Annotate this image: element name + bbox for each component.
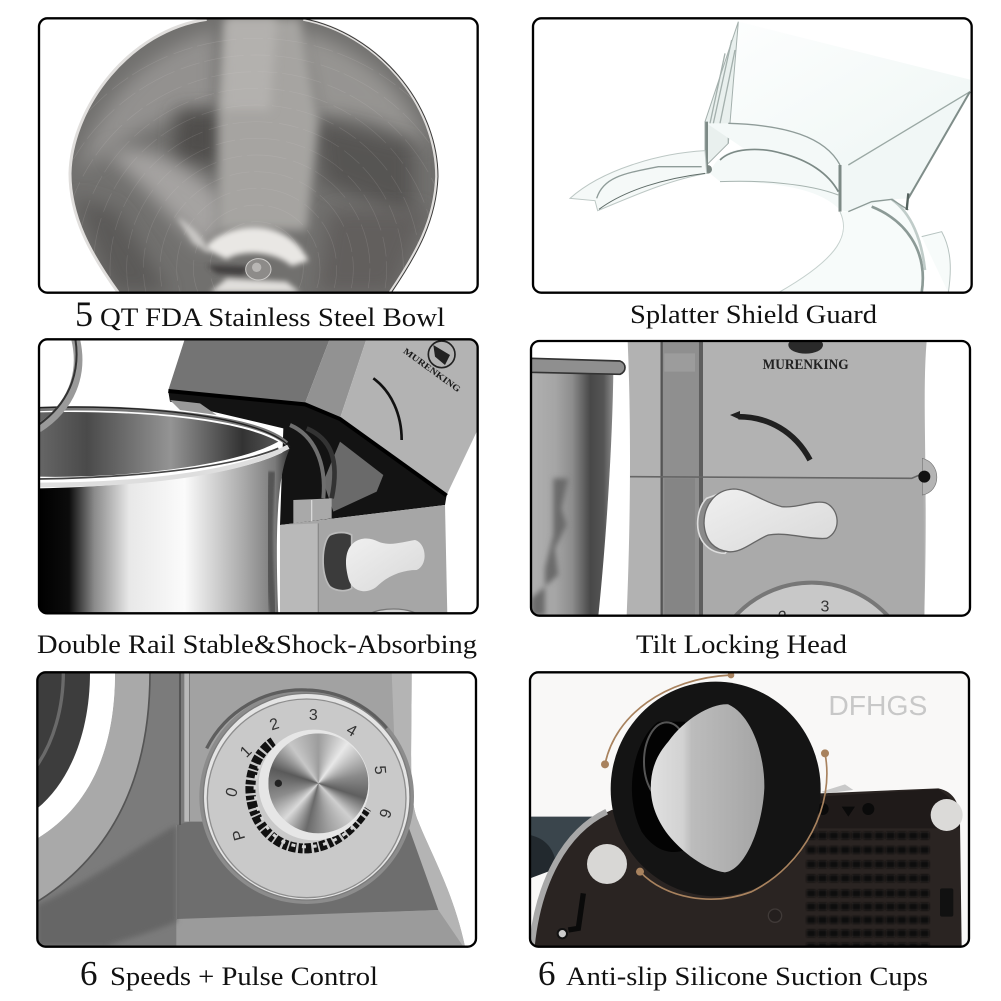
device base [530, 788, 962, 947]
panel frame [37, 672, 476, 947]
shield left fin [705, 22, 738, 167]
bowl body [72, 20, 436, 292]
logo [762, 342, 848, 369]
panel: suction cups [530, 672, 969, 947]
dial numbers: P [230, 828, 249, 842]
lower body [280, 505, 447, 615]
small vents [842, 807, 855, 817]
panel: speed control [37, 672, 476, 947]
panel: tilt lock [530, 340, 972, 617]
mixer head front [340, 338, 478, 495]
panel: stainless steel bowl [38, 17, 479, 294]
bottom highlight [205, 227, 308, 266]
caption: speeds [80, 954, 378, 993]
speed dial [734, 580, 890, 614]
caption: bowl [75, 294, 445, 334]
panel frame [533, 18, 972, 293]
bowl cradle [37, 672, 150, 902]
watermark: DFHGS [828, 690, 927, 721]
caption: rail: Double Rail Stable&Shock-Absorbing [37, 630, 477, 659]
lever [323, 532, 425, 591]
caption: speeds: 6 [80, 954, 98, 993]
knurled ring [250, 742, 367, 848]
tilt arrow [730, 411, 810, 460]
light centre reflection [218, 18, 318, 230]
dial numbers: 1 [237, 743, 256, 761]
column strip [662, 341, 700, 616]
shield right wing [840, 92, 970, 212]
base shadow [177, 822, 438, 920]
dial numbers: 6 [375, 806, 394, 820]
caption: suction cups: Anti-slip Silicone Suction Cups [566, 962, 928, 991]
dial numbers: 0 [223, 786, 242, 799]
dial numbers [223, 707, 394, 842]
dial numbers: 5 [371, 765, 388, 775]
panel: double rail [38, 337, 478, 628]
blue mixer part [530, 817, 602, 868]
panel frame [531, 341, 970, 616]
bowl rim [39, 408, 287, 443]
vent grid [807, 836, 930, 947]
body right side [190, 672, 465, 947]
lever [698, 489, 837, 553]
shield left lip [570, 151, 707, 211]
bowl side [531, 372, 613, 616]
logo: MURENKING [763, 357, 849, 373]
shield lower ring [840, 212, 842, 213]
caption: suction cups: 6 [538, 954, 556, 993]
magnifier circle [611, 682, 821, 896]
side slot [940, 888, 953, 917]
panel frame [39, 339, 478, 613]
guide rail block [293, 498, 332, 523]
caption: bowl: 5 [75, 294, 93, 334]
side pin [918, 458, 937, 495]
white gap [37, 672, 115, 838]
bowl rim [70, 19, 437, 293]
column [37, 672, 190, 947]
caption: bowl: QT FDA Stainless Steel Bowl [100, 303, 445, 332]
lower edge of head [168, 391, 447, 496]
caption: shield: Splatter Shield Guard [630, 300, 877, 329]
bowl dark edge [37, 672, 90, 808]
large silicone cup [651, 704, 764, 872]
logo text: MURENKING [401, 346, 463, 394]
mixer body [627, 341, 927, 616]
centre dimple [246, 259, 271, 280]
inner hinge cavity [168, 392, 447, 525]
speed dial: 2 [777, 608, 790, 627]
bowl inside [39, 412, 278, 477]
logo text [401, 341, 463, 394]
orange arcs [605, 675, 827, 899]
caption: tilt: Tilt Locking Head [636, 630, 847, 659]
panel frame [530, 672, 969, 947]
caption: speeds: Speeds + Pulse Control [110, 962, 378, 991]
small cups [587, 844, 627, 884]
dial numbers: 2 [268, 715, 281, 734]
bowl outer body [39, 448, 290, 615]
caption: suction cups [538, 954, 928, 993]
panel: splatter shield [533, 18, 972, 293]
brushed steel texture [74, 40, 434, 292]
dial numbers: 4 [343, 722, 360, 741]
dial numbers: 3 [309, 707, 318, 724]
shield upper wall [753, 55, 970, 165]
shield curved band [707, 123, 840, 210]
knob [259, 730, 369, 840]
speed dial [199, 689, 414, 904]
mixer head dark side [168, 338, 330, 403]
panel frame [39, 18, 478, 293]
speed dial: 3 [821, 599, 830, 616]
tilt arrow [373, 378, 402, 440]
whisk guard arc [38, 337, 78, 428]
